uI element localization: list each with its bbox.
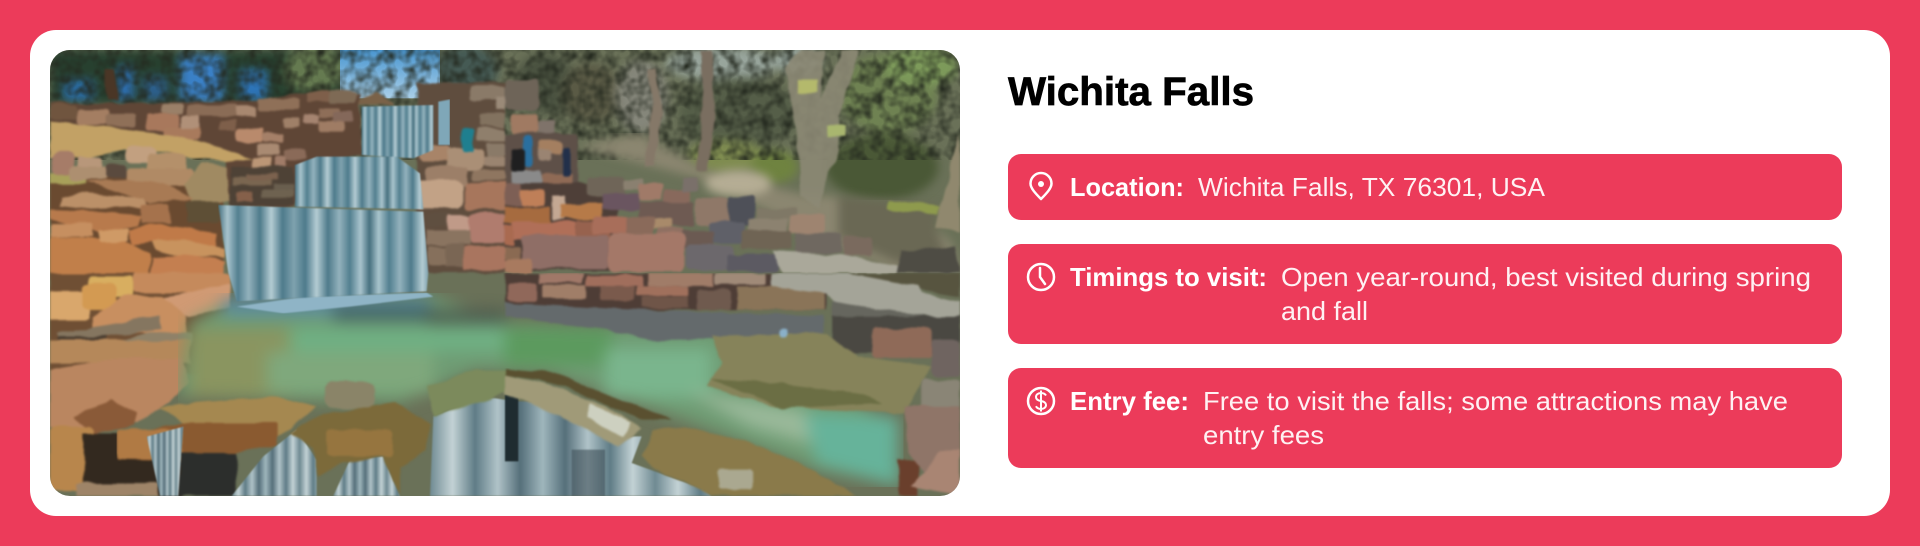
grass hill <box>50 122 253 162</box>
stones right of people, upper right quadrant <box>505 80 538 110</box>
left lower rocks, third quadrant <box>50 273 230 373</box>
lower brown shelf and falls backdrop <box>160 396 317 436</box>
upper cascades <box>218 99 450 301</box>
timings value: Open year-round, best visited during spring <box>1281 262 1811 292</box>
photo: Wichita Falls waterfall <box>50 45 960 496</box>
info row: location <box>1008 154 1842 220</box>
far trees <box>665 47 778 80</box>
people <box>462 128 473 152</box>
timings value <box>1281 262 1811 326</box>
location label: Location: <box>1070 172 1184 202</box>
icon: map pin <box>1030 173 1052 199</box>
info row: entry fee <box>1008 368 1842 468</box>
entry fee value: Free to visit the falls; some attractions may have <box>1203 386 1788 416</box>
mid rocks <box>230 167 293 205</box>
right stones of upper cascades <box>417 83 505 273</box>
icon: clock <box>1028 264 1054 290</box>
lower falls <box>147 395 712 496</box>
icon: dollar <box>1028 388 1054 414</box>
timings label: Timings to visit: <box>1070 262 1267 292</box>
timings value: and fall <box>1281 296 1368 326</box>
entry fee value <box>1203 386 1788 450</box>
info row: timings <box>1008 244 1842 344</box>
entry fee value: entry fees <box>1203 420 1324 450</box>
entry fee label: Entry fee: <box>1070 386 1189 416</box>
location value: Wichita Falls, TX 76301, USA <box>1198 172 1546 202</box>
reeds and right walls <box>117 273 960 496</box>
pool <box>178 293 903 487</box>
heading: Wichita Falls <box>1008 70 1254 114</box>
water highlights <box>237 293 433 313</box>
right-bottom rocks <box>898 460 918 496</box>
upper stone wall <box>50 92 362 207</box>
